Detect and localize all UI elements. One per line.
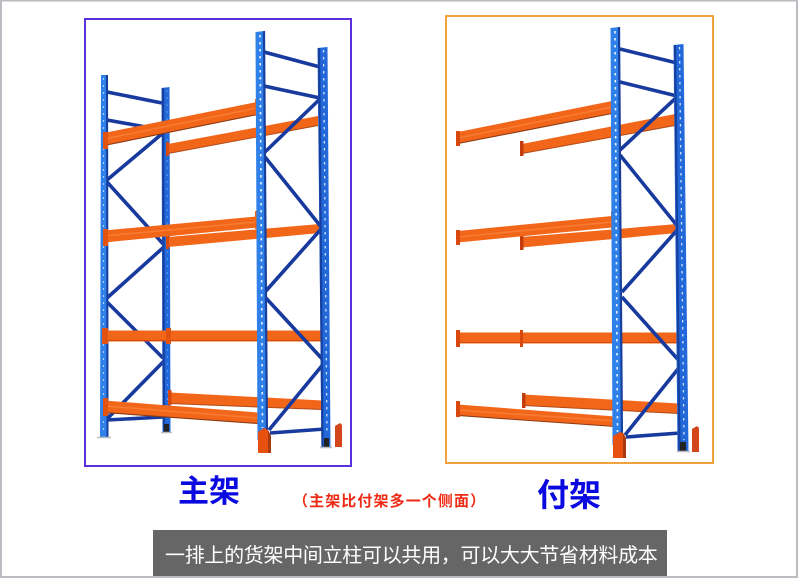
frame braces bbox=[620, 49, 682, 437]
heading: main rack: 主架 bbox=[178, 474, 240, 509]
caption text: 一排上的货架中间立柱可以共用，可以大大节省材料成本 bbox=[165, 545, 658, 567]
back beams bbox=[520, 114, 679, 414]
back beams bbox=[166, 116, 322, 410]
front post bbox=[610, 27, 622, 445]
second post bbox=[161, 87, 172, 432]
panel: main rack frame bbox=[85, 19, 351, 466]
small guard bbox=[692, 426, 699, 452]
left frame braces bbox=[107, 92, 165, 420]
front beams bbox=[456, 97, 679, 426]
caption bar bbox=[153, 530, 667, 576]
secondary rack illustration bbox=[456, 27, 699, 458]
third post bbox=[256, 31, 268, 440]
main rack illustration bbox=[97, 31, 342, 453]
panel: secondary rack frame bbox=[446, 16, 713, 463]
fourth post bbox=[318, 47, 332, 448]
left post bbox=[97, 75, 111, 438]
small guard bbox=[335, 423, 342, 447]
post protector bbox=[258, 428, 271, 453]
rear post bbox=[674, 44, 690, 452]
post protector bbox=[613, 432, 626, 458]
heading: secondary rack: 付架 bbox=[537, 477, 601, 513]
front beams bbox=[102, 99, 322, 424]
right frame braces bbox=[264, 52, 325, 433]
note: difference between racks: （主架比付架多一个侧面） bbox=[293, 493, 486, 510]
